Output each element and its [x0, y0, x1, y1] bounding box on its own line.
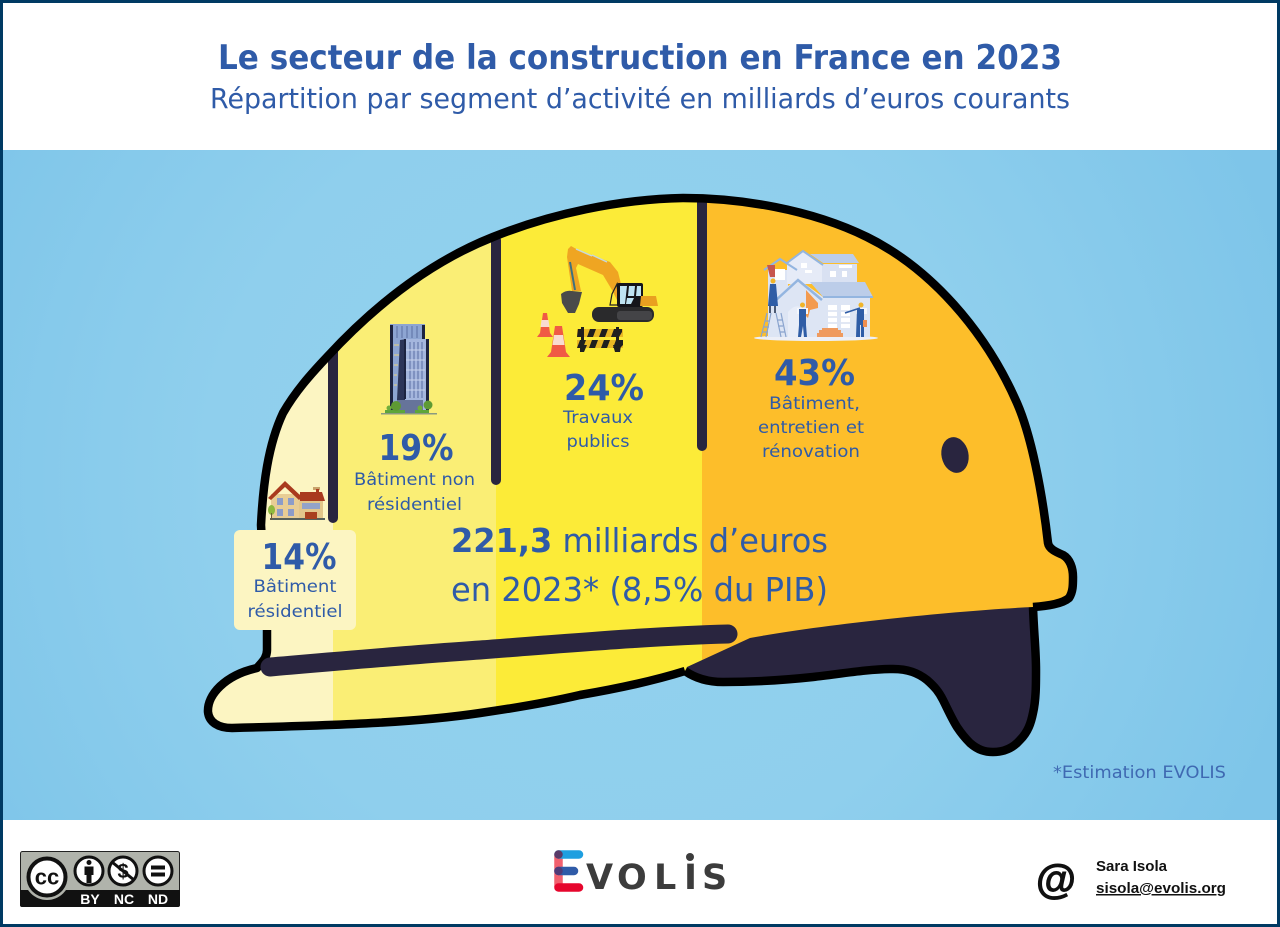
label: 43% bâtiment, entretien et rénovation: rénovation [762, 442, 860, 462]
label: 14% bâtiment résidentiel: 14% [262, 537, 336, 578]
callout: total: en 2023* (8,5% du PIB) [451, 570, 828, 609]
header background [0, 0, 1280, 150]
helmet illustration [200, 190, 1082, 752]
divider 2 [491, 240, 501, 480]
label: 43% bâtiment, entretien et rénovation: 43% [774, 353, 855, 394]
helmet shell segments [200, 190, 1082, 735]
helmet strap [270, 634, 728, 667]
icon: at sign: @ [1036, 856, 1076, 902]
label: 43% bâtiment, entretien et rénovation [758, 353, 864, 462]
label: 19% bâtiment non résidentiel [354, 428, 475, 515]
label: 14% bâtiment résidentiel [248, 537, 342, 622]
callout: total [451, 521, 828, 609]
label: 14% bâtiment résidentiel: résidentiel [248, 602, 342, 622]
label: 14% bâtiment résidentiel: Bâtiment [254, 577, 337, 597]
contact: sisola@evolis.org [1096, 880, 1226, 897]
icon: creative commons badge: BY [80, 891, 100, 907]
contact: Sara Isola [1096, 858, 1168, 875]
icon: creative commons badge: cc [35, 864, 59, 890]
label: 19% bâtiment non résidentiel: résidentiel [367, 495, 462, 515]
icon: traffic cones [537, 313, 570, 357]
icon: road barrier [577, 327, 623, 352]
label: 19% bâtiment non résidentiel: 19% [378, 428, 454, 469]
icon: creative commons badge: ND [148, 891, 168, 907]
icon: office tower [381, 324, 437, 414]
helmet vent hole [938, 435, 972, 475]
label: 24% travaux publics: 24% [564, 368, 644, 409]
label box: résidentiel [234, 530, 356, 630]
icon: creative commons badge: $ [117, 861, 129, 883]
logo: EVOLIS [554, 850, 727, 898]
footnote: *Estimation EVOLIS [1053, 763, 1226, 782]
callout: total: 221,3 milliards d’euros [451, 521, 828, 560]
panel: sky background [3, 150, 1277, 820]
label: 24% travaux publics: Travaux [562, 408, 633, 428]
icon: renovation house [754, 251, 878, 341]
helmet neck guard [680, 600, 1036, 752]
divider 1 [328, 352, 338, 518]
contact [1096, 858, 1226, 897]
helmet outline [208, 198, 1073, 728]
subtitle: Répartition par segment d’activité en milliards d’euros courants [210, 82, 1070, 115]
logo: EVOLIS: VOLIS [586, 858, 727, 898]
divider 3 [697, 202, 707, 446]
label: 43% bâtiment, entretien et rénovation: entretien et [758, 418, 864, 438]
label: 43% bâtiment, entretien et rénovation: Bâtiment, [769, 394, 860, 414]
footer background [3, 820, 1277, 924]
icon: small house [268, 481, 325, 520]
icon: creative commons badge [20, 852, 180, 907]
icon: creative commons badge: NC [114, 891, 134, 907]
label: 24% travaux publics: publics [566, 432, 630, 452]
title: Le secteur de la construction en France en 2023 [218, 38, 1062, 78]
label: 19% bâtiment non résidentiel: Bâtiment non [354, 470, 475, 490]
icon: excavator [561, 246, 658, 322]
label: 24% travaux publics [562, 368, 644, 452]
